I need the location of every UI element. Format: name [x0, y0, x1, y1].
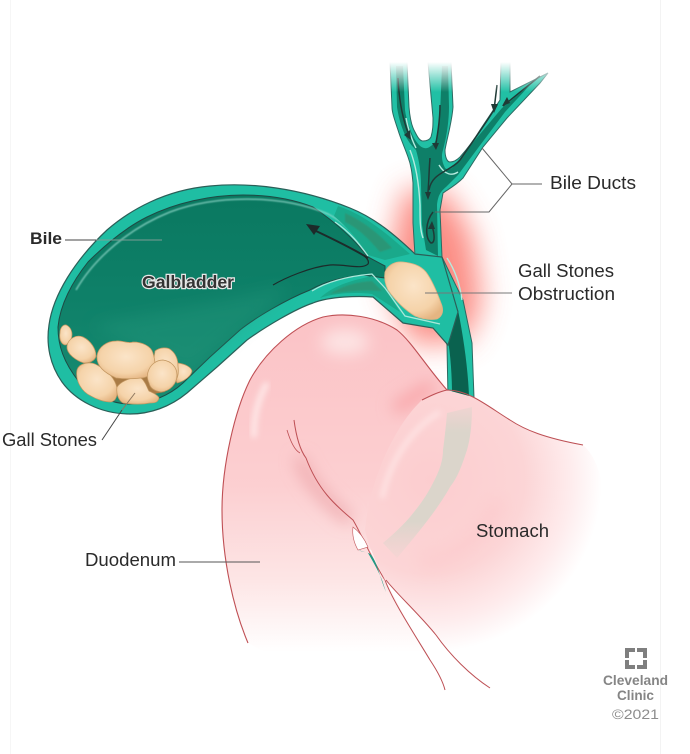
lumen texture — [90, 285, 290, 372]
stone shadow backing — [100, 365, 165, 400]
label: Bile Ducts: Bile Ducts — [550, 173, 636, 193]
bile ducts — [390, 62, 548, 398]
stomach inner shading — [420, 500, 500, 561]
label: Galbladder: Galbladder — [142, 272, 234, 292]
logo wordmark: Cleveland — [603, 672, 668, 688]
logo wordmark — [603, 672, 668, 722]
duodenum outline — [222, 315, 447, 643]
label: Gall Stones Obstruction: Obstruction — [518, 284, 615, 304]
duodenum fold crease — [294, 420, 445, 690]
white slit and teal gap — [353, 527, 386, 592]
duodenum — [222, 315, 470, 690]
duct highlights — [406, 118, 462, 300]
second crease line — [287, 430, 300, 453]
grey band across stomach — [383, 407, 472, 558]
stomach — [365, 390, 603, 688]
neck lining highlights — [312, 222, 440, 324]
label: Gall Stones Obstruction: Gall Stones — [518, 261, 614, 281]
logo wordmark: Clinic — [617, 687, 654, 703]
leader lines — [65, 148, 542, 562]
stomach outline — [422, 390, 583, 445]
duodenum highlights and shading — [254, 329, 432, 520]
gall stones in gallbladder — [60, 325, 192, 404]
label: Duodenum: Duodenum — [85, 550, 176, 570]
label: Bile: Bile — [30, 229, 62, 248]
bile flow arrow — [273, 224, 368, 285]
label: Stomach: Stomach — [476, 521, 549, 541]
gallbladder wall — [48, 185, 458, 414]
bile lumen — [58, 195, 385, 404]
bile flow arrows in ducts — [398, 76, 540, 243]
duct lumen — [396, 66, 530, 256]
wall highlight — [76, 199, 372, 290]
stomach fold highlight — [382, 412, 440, 498]
label: Gall Stones: Gall Stones — [2, 430, 97, 450]
icon: logo mark — [625, 648, 647, 669]
neck wall mottling — [320, 206, 410, 312]
Cleveland Clinic logo — [603, 648, 668, 722]
gallbladder — [48, 185, 458, 414]
duct wall — [390, 62, 548, 398]
obstructing gall stone — [385, 262, 443, 319]
logo wordmark: ©2021 — [612, 706, 659, 722]
red inflammation glow — [385, 190, 482, 345]
lower duct lumen — [448, 310, 469, 396]
stomach lower edge — [386, 580, 490, 688]
label: Gall Stones Obstruction — [518, 261, 615, 304]
